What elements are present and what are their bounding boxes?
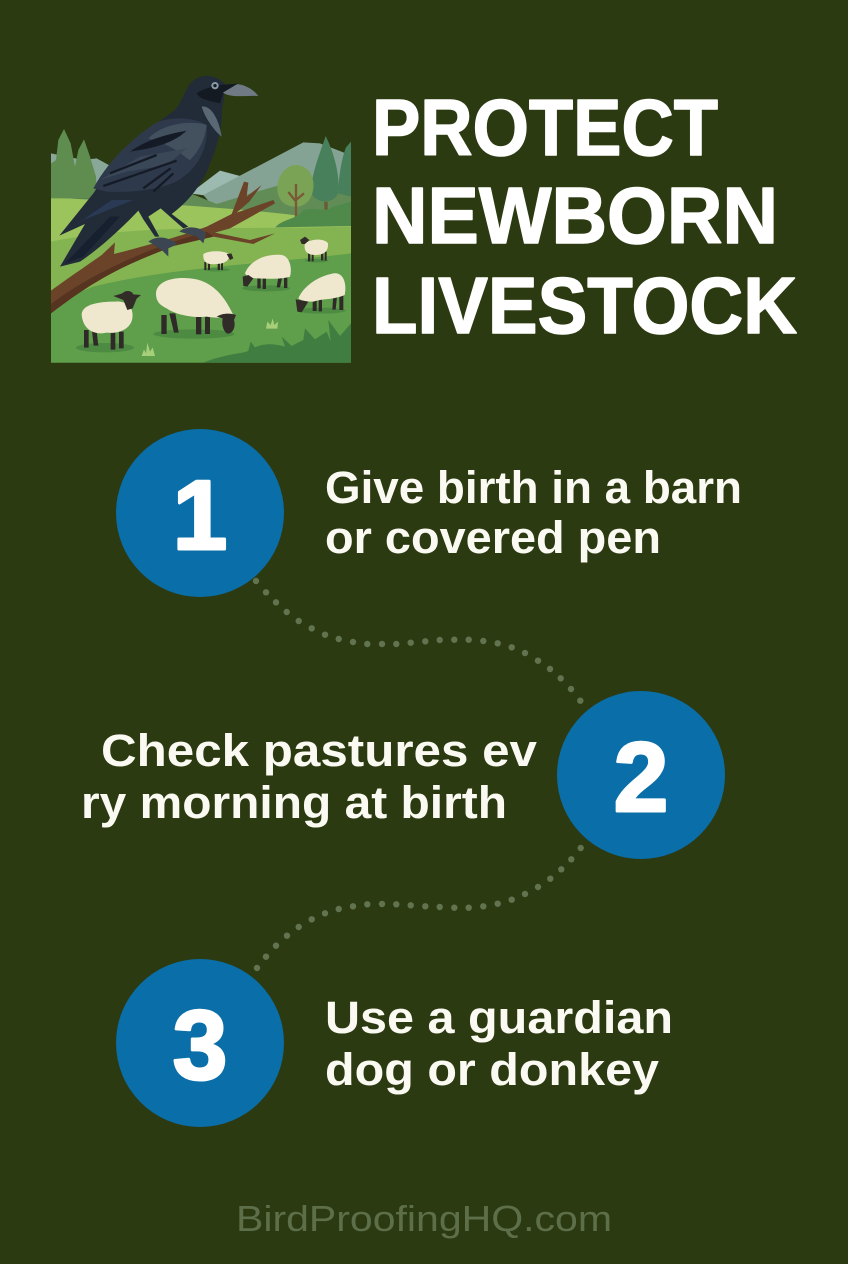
step 3 text	[325, 992, 673, 1095]
step 2 badge: 2	[614, 722, 668, 832]
sheep flock	[76, 237, 346, 356]
sheep: back small right	[300, 237, 329, 262]
step 1 badge	[116, 429, 284, 597]
sheep: far right	[296, 273, 346, 314]
branch	[51, 182, 275, 313]
step 2	[81, 691, 725, 859]
step 1 text	[325, 462, 742, 563]
title: NEWBORN	[372, 171, 778, 260]
footer website: BirdProofingHQ.com	[236, 1198, 612, 1239]
dotted connector: step 2 to step 3	[254, 845, 584, 971]
step 1 badge: 1	[173, 460, 227, 570]
step 2 text: ry morning at birth	[81, 777, 507, 828]
step 3 text: dog or donkey	[325, 1044, 659, 1095]
step 1 text: Give birth in a barn	[325, 462, 742, 513]
step 2 text: Check pastures ev	[101, 725, 537, 776]
step 2 badge	[557, 691, 725, 859]
step 3 text: Use a guardian	[325, 992, 673, 1043]
title	[372, 83, 797, 350]
sheep: front centre	[153, 278, 236, 339]
step 2 text	[81, 725, 537, 828]
illustration: raven on a branch above grazing sheep	[51, 76, 351, 363]
title: PROTECT	[372, 83, 718, 172]
trees	[51, 129, 351, 227]
meadow background	[51, 142, 351, 363]
step 3 badge: 3	[173, 990, 227, 1100]
sheep: front left	[76, 291, 141, 352]
step 1	[116, 429, 742, 597]
dotted connector: step 1 to step 2	[253, 578, 584, 704]
sheep: middle right	[242, 255, 291, 291]
step 3	[116, 959, 673, 1127]
step 1 text: or covered pen	[325, 512, 661, 563]
raven	[59, 76, 258, 267]
grass tufts	[142, 318, 278, 356]
step 3 badge	[116, 959, 284, 1127]
sheep: back small centre	[203, 251, 233, 271]
title: LIVESTOCK	[372, 261, 797, 350]
